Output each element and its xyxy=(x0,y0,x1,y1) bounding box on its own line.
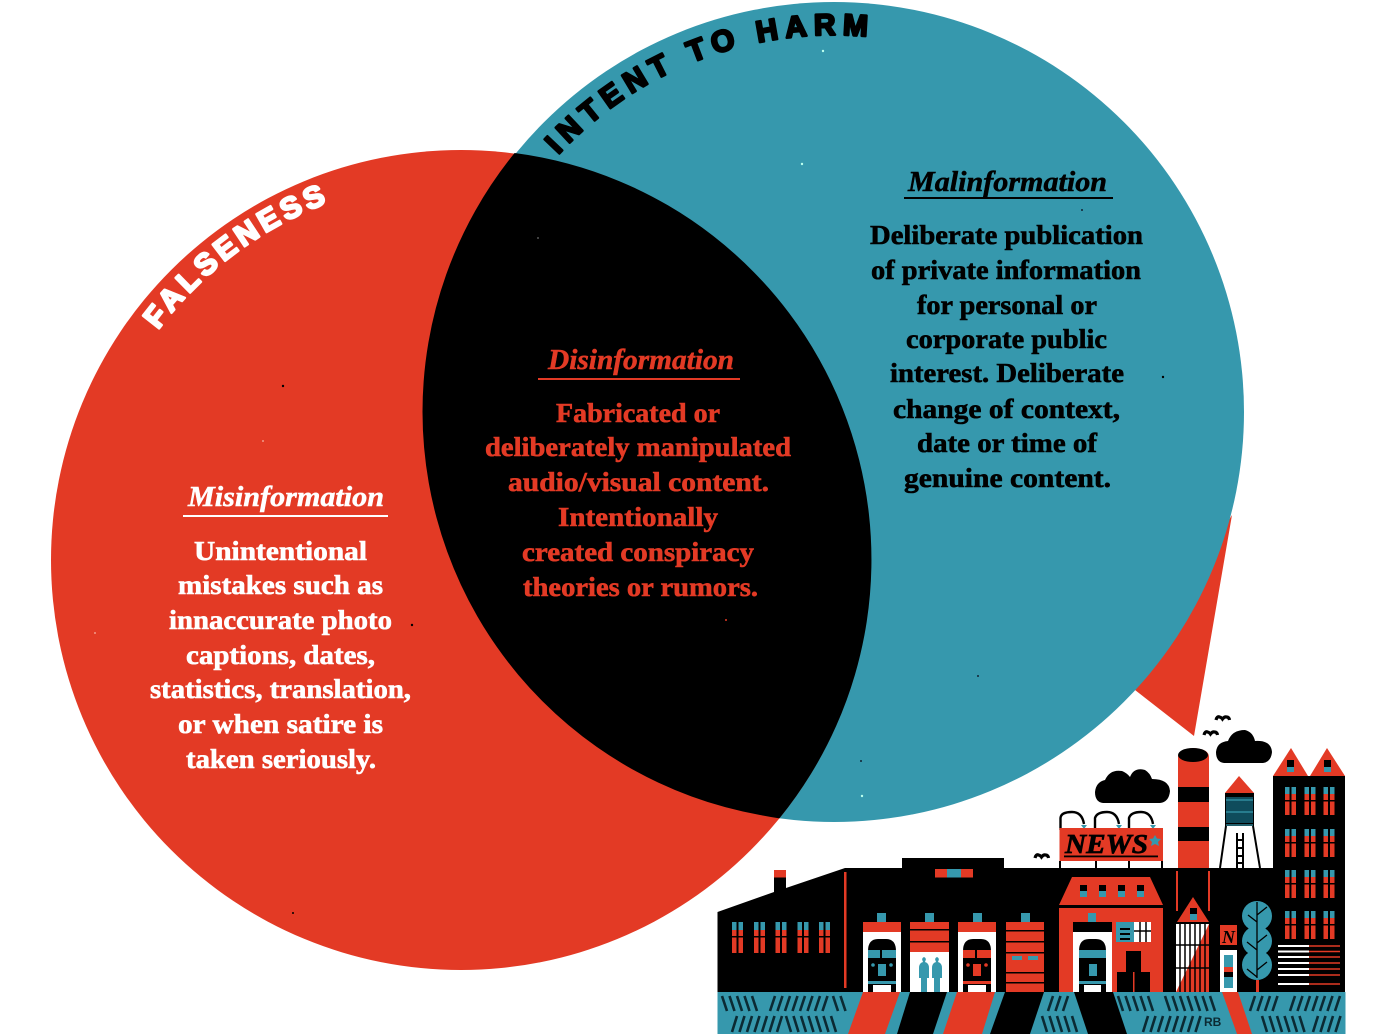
apartment tower xyxy=(1273,748,1345,984)
text: malinformation description: genuine content. xyxy=(904,462,1111,493)
warehouse windows xyxy=(732,922,830,953)
chimney cap xyxy=(774,870,786,878)
train: red xyxy=(963,939,991,992)
panel: disinformation xyxy=(485,345,791,602)
black skyline buildings xyxy=(718,776,1345,992)
N shop xyxy=(1220,925,1237,992)
curved label: falseness: FALSENESS xyxy=(142,185,326,330)
text: disinformation description: theories or rumors. xyxy=(523,571,758,602)
text: misinformation description: innaccurate photo xyxy=(169,604,392,635)
text: misinformation description: taken seriously. xyxy=(186,743,376,774)
text: misinformation description: captions, dates, xyxy=(186,639,375,670)
underline: misinformation xyxy=(183,515,388,517)
water tower xyxy=(1220,776,1260,868)
underline: disinformation xyxy=(538,378,740,380)
birds xyxy=(1035,717,1230,858)
cloud: left xyxy=(1095,769,1170,803)
red station building xyxy=(1059,877,1163,992)
text: malinformation description: date or time of xyxy=(917,427,1098,458)
text: disinformation description: Intentionally xyxy=(558,501,718,532)
circle: intent to harm xyxy=(424,2,1244,822)
text: disinformation description: audio/visual content. xyxy=(508,466,769,497)
text: misinformation description xyxy=(150,535,411,774)
smokestack xyxy=(1178,748,1209,868)
heading: malinformation: Malinformation xyxy=(907,167,1107,198)
panel: malinformation xyxy=(870,167,1143,493)
illustration: news town xyxy=(718,717,1346,1034)
vertical divider xyxy=(844,872,846,988)
text: misinformation description: statistics, translation, xyxy=(150,673,411,704)
timbered house xyxy=(1176,871,1210,992)
text: disinformation description: deliberately manipulated xyxy=(485,431,791,462)
underline: malinformation xyxy=(904,197,1113,199)
text: malinformation description xyxy=(870,219,1143,493)
ground with road stripes xyxy=(718,992,1346,1034)
text: disinformation description xyxy=(485,397,791,602)
text: malinformation description: change of context, xyxy=(893,393,1120,424)
roof sign xyxy=(935,869,973,878)
news sign: NEWS xyxy=(1064,829,1148,859)
cloud: right xyxy=(1216,730,1272,763)
text: misinformation description: or when satire is xyxy=(178,708,383,739)
text: misinformation description: Unintentional xyxy=(194,535,367,566)
text: malinformation description: interest. Deliberate xyxy=(890,357,1124,388)
signature: RB xyxy=(1204,1015,1222,1029)
news sign xyxy=(1060,812,1163,868)
train: teal xyxy=(868,939,896,992)
garage bays xyxy=(863,913,1044,992)
text: misinformation description: mistakes such as xyxy=(178,569,383,600)
overlap: disinformation lens xyxy=(422,153,871,818)
text: malinformation description: corporate public xyxy=(906,323,1107,354)
heading: misinformation: Misinformation xyxy=(187,482,384,513)
heading: disinformation: Disinformation xyxy=(547,345,734,376)
text: malinformation description: Deliberate publication xyxy=(870,219,1143,250)
N shop: N xyxy=(1221,927,1236,947)
speckle texture xyxy=(94,50,1164,914)
speech bubble tail xyxy=(1135,515,1232,736)
curved label: intent to harm: INTENT TO HARM xyxy=(543,13,868,155)
panel: misinformation xyxy=(150,482,411,774)
text: malinformation description: for personal or xyxy=(917,289,1097,320)
two figures xyxy=(919,957,942,992)
tree xyxy=(1242,901,1272,992)
text: disinformation description: Fabricated or xyxy=(556,397,720,428)
circle: falseness xyxy=(51,150,871,970)
text: disinformation description: created conspiracy xyxy=(522,536,754,567)
text: malinformation description: of private information xyxy=(871,254,1141,285)
